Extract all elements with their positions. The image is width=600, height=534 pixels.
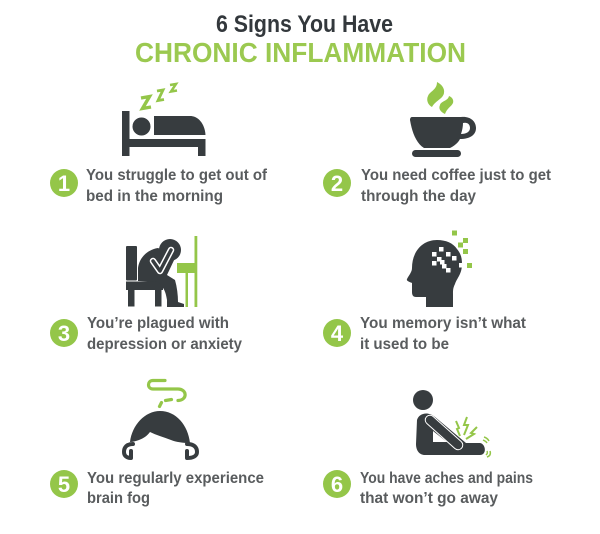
badge 4 <box>323 319 351 347</box>
icon: person sleeping in bed <box>122 84 206 156</box>
text: sign 1: bed in the morning <box>86 188 223 205</box>
text: sign 4: it used to be <box>360 336 449 353</box>
icon: depressed person at desk <box>126 236 197 307</box>
icon: seated person with aching leg <box>413 390 490 457</box>
title: CHRONIC INFLAMMATION <box>135 37 466 68</box>
title <box>135 11 466 68</box>
badge 2 <box>323 169 351 197</box>
badge 3: 3 <box>58 321 70 346</box>
text: sign 1 <box>86 167 268 205</box>
text: sign 5 <box>87 470 264 507</box>
text: sign 3: You’re plagued with <box>87 315 229 332</box>
badge 4: 4 <box>331 321 344 346</box>
text: sign 5: brain fog <box>87 490 150 507</box>
text: sign 3 <box>87 315 242 353</box>
icon: head with brain fog swirl <box>124 380 197 458</box>
badge 1: 1 <box>58 171 70 196</box>
badge 3 <box>50 319 78 347</box>
text: sign 2 <box>361 167 551 205</box>
text: sign 4 <box>360 315 526 353</box>
text: sign 2: You need coffee just to get <box>361 167 551 184</box>
text: sign 2: through the day <box>361 188 476 205</box>
badge 6 <box>323 470 351 498</box>
badge 2: 2 <box>331 171 343 196</box>
text: sign 3: depression or anxiety <box>87 336 242 353</box>
icon: steaming coffee cup <box>410 82 476 157</box>
badge 1 <box>50 169 78 197</box>
text: sign 1: You struggle to get out of <box>86 167 268 184</box>
text: sign 6 <box>360 470 533 507</box>
text: sign 6: You have aches and pains <box>360 470 533 487</box>
badge 5 <box>50 470 78 498</box>
icon: head with fading memory pixels <box>407 230 472 307</box>
text: sign 6: that won’t go away <box>360 490 498 507</box>
text: sign 4: You memory isn’t what <box>360 315 526 332</box>
title: 6 Signs You Have <box>216 11 393 38</box>
badge 6: 6 <box>331 472 343 497</box>
text: sign 5: You regularly experience <box>87 470 264 487</box>
badge 5: 5 <box>58 472 70 497</box>
